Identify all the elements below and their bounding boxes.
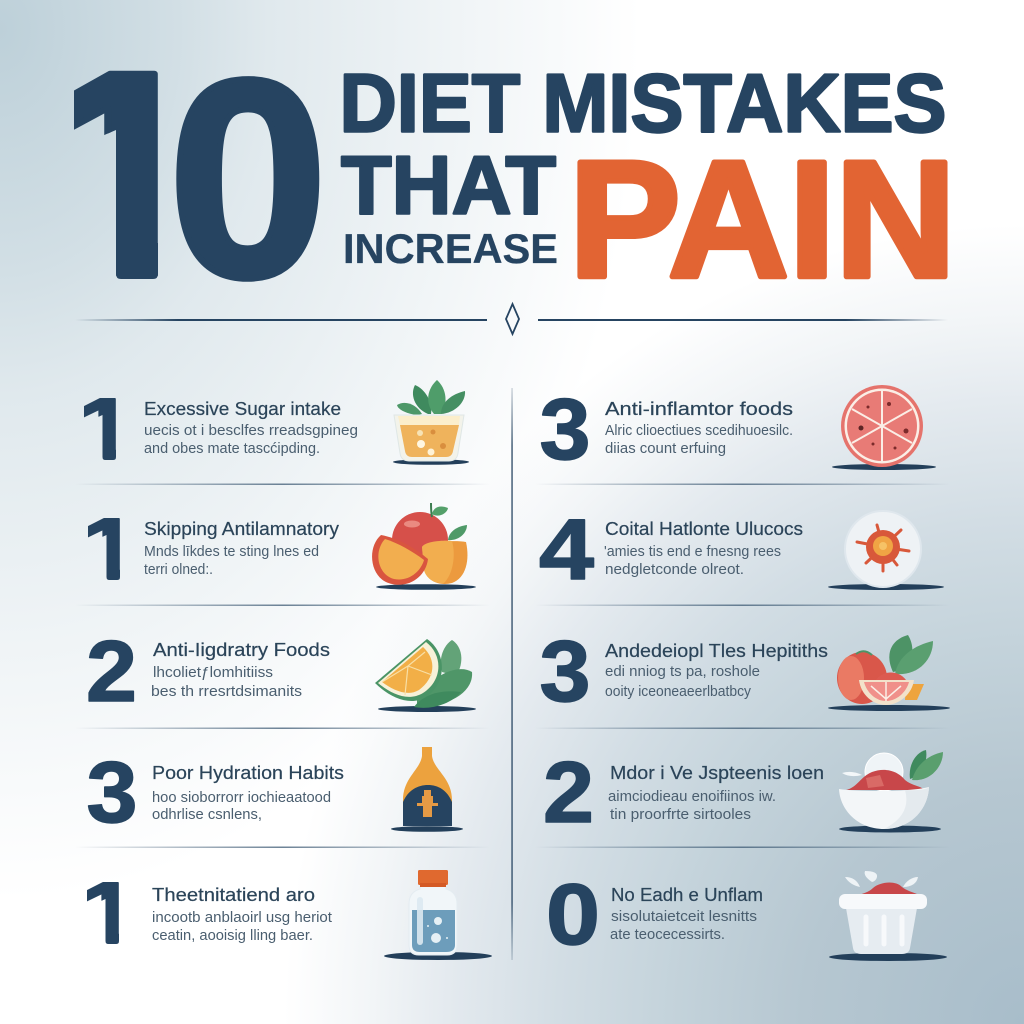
row dividers (75, 484, 950, 848)
heading: Anti-inflamtor foods (605, 398, 793, 419)
panel: right item 1 (540, 382, 936, 478)
heading: Andedeiopl Tles Hepitiths (605, 640, 828, 661)
icon: inflamed cell in dish (828, 511, 944, 590)
number: 0 (546, 867, 600, 963)
number: 1 (77, 499, 140, 598)
panel: right item 5 (546, 867, 947, 963)
icon: pot with splash (829, 871, 947, 961)
description: edi nniog ts pa, roshole (605, 664, 760, 680)
title digit 1: 1 (28, 11, 217, 339)
panel: left item 4 (86, 745, 463, 841)
description: nedgletconde olreot. (605, 562, 744, 578)
panel: left item 2 (88, 503, 476, 590)
description: ceatin, aooisig lling baer. (152, 928, 313, 944)
number: 3 (540, 624, 590, 720)
number: 1 (76, 863, 139, 962)
heading: Excessive Sugar intake (144, 398, 341, 419)
description: Alric clioectiues scedihuoesilc. (605, 423, 793, 439)
heading: Anti-Iigdratry Foods (153, 639, 330, 660)
description: bes th rresrtdsimanits (151, 684, 302, 700)
number: 3 (86, 745, 138, 841)
panel: right item 4 (543, 745, 943, 841)
heading: Mdor i Ve Jspteenis loen (610, 762, 824, 783)
icon: bottle (391, 747, 463, 832)
icon: water jar (384, 870, 492, 960)
heading: Theetnitatiend aro (152, 884, 315, 905)
description: ate teocecessirts. (610, 927, 725, 943)
title line: increase: INCREASE (343, 225, 558, 272)
icon: apple, grapefruit and leaves (828, 635, 950, 711)
icon: grapefruit slice (832, 385, 936, 470)
title (74, 70, 948, 282)
panel: right item 3 (540, 624, 950, 720)
description: odhrlise csnlens, (152, 807, 262, 823)
description: sisolutaietceit lesnitts (611, 909, 757, 925)
description: ooity iceoneaeerlbatbcy (605, 684, 752, 700)
panel: right item 2 (539, 502, 944, 598)
heading: Skipping Antilamnatory (144, 518, 340, 539)
title digit 0: 0 (168, 21, 328, 336)
heading: Coital Hatlonte Ulucocs (605, 518, 803, 539)
description: terri olned:. (144, 562, 213, 578)
icon: apple and orange halves (372, 503, 476, 590)
description: aimciodieau enoifiinos iw. (608, 789, 776, 805)
description: tin proorfrte sirtooles (610, 807, 751, 823)
heading: Poor Hydration Habits (152, 762, 344, 783)
vertical column divider (511, 388, 513, 960)
number: 1 (73, 379, 136, 478)
header divider with diamond (75, 304, 948, 334)
description: lhcolietƒlomhitiiss (153, 665, 273, 681)
number: 2 (543, 745, 594, 841)
panel: left item 5 (87, 870, 492, 960)
icon: bowl with leaf (839, 750, 943, 832)
description: diias count erfuing (605, 441, 726, 457)
panel: left item 1 (84, 380, 469, 465)
description: uecis ot i besclfes rreadsgpineg (144, 423, 358, 439)
description: Mnds līkdes te sting lnes ed (144, 544, 319, 560)
title word: pain: PAIN (569, 128, 956, 312)
icon: herb drink glass (393, 380, 469, 465)
description: 'amies tis end e fnesng rees (604, 544, 781, 560)
number: 3 (540, 382, 590, 478)
description: hoo sioborrorr iochieaatood (152, 790, 331, 806)
description: incootb anblaoirl usg heriot (152, 910, 332, 926)
panel: left item 3 (86, 624, 476, 720)
description: and obes mate tascćipding. (144, 441, 320, 457)
number: 4 (539, 502, 594, 598)
heading: No Eadh e Unflam (611, 884, 763, 905)
title line: that: THAT (341, 139, 556, 232)
icon: orange slice with leaves (375, 639, 476, 712)
number: 2 (86, 624, 137, 720)
title line: diet mistakes: DIET MISTAKES (340, 57, 946, 150)
